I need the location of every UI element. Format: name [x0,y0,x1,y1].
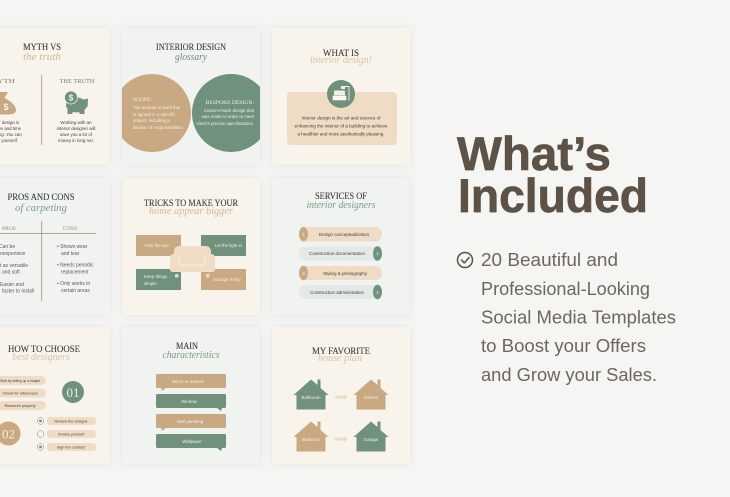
circle: bespoke design: Custom-made design that [204,108,255,113]
house: kitchen: Kitchen [364,395,379,400]
list: pros: Easier and [0,282,24,288]
heading: how to choose: HOW TO CHOOSE [8,344,80,354]
circle: scope [122,74,191,152]
script heading: interior designers: interior designers [306,200,376,211]
list: cons: replacement [61,270,89,276]
checklist: first group: Research properly [4,404,36,408]
text: definition: enhancing the interior of a building to achieve [294,124,388,128]
text: truth description: save you a lot of [60,132,93,137]
script heading: of carpeting: of carpeting [15,202,67,214]
arrow [335,394,348,400]
text: description [481,250,676,385]
definition box [287,92,397,145]
step 4 [299,285,382,299]
heading: what is: WHAT IS [323,48,359,58]
script heading: interior design: interior design! [310,55,372,66]
circle: bespoke design: client's precise specifications. [197,121,254,126]
panel: what is interior design [272,28,410,165]
house: garage: Garage [364,437,379,442]
house: bedroom: Bedroom [302,437,320,442]
list: pros: t as versatile [0,263,28,269]
divider [40,75,43,145]
circle: bespoke design: was made to order to meet [202,114,255,119]
checklist: second group: Involve yourself [58,432,85,436]
step 3: Styling & photography [323,271,368,276]
title: what's included: Included [458,169,648,222]
heading: myth vs: MYTH VS [23,42,61,52]
checklist: second group [37,417,96,451]
step 3: 3 [302,271,305,276]
panel: how to choose best designers [0,327,110,464]
script heading: home appear bigger: home appear bigger [149,206,233,217]
text: definition [294,116,388,136]
list: pros [0,244,34,294]
tip: storage is key: Storage is key [213,277,242,282]
tip: let the light in: Let the light in [215,243,243,248]
panel: tricks to make your home appear bigger [122,178,260,315]
heading: interior design: INTERIOR DESIGN [156,42,226,52]
text: truth description [57,120,95,143]
text: description: to Boost your Offers [481,336,646,356]
title: what's included: What’s [457,127,611,180]
step 1 [299,227,382,242]
script heading: house plan: house plan [318,353,362,364]
title: what's included [457,127,648,222]
table rules [0,221,96,301]
heading: main: MAIN [176,341,198,351]
tip: trick the eye: Trick the eye [144,243,170,248]
text: truth description: Working with an [60,120,92,125]
script heading: characteristics: characteristics [162,350,220,361]
checklist: second group: Sign the contract [57,446,86,450]
step 3 [299,266,382,280]
callout: wallpaper: Wallpaper [182,439,202,444]
heading: my favorite: MY FAVORITE [312,346,370,356]
heading: tricks: TRICKS TO MAKE YOUR [144,198,238,208]
list: cons [57,244,94,294]
tip: keep things simple: simple [144,281,157,286]
panel: myth vs the truth [0,28,110,165]
script heading: the truth: the truth [23,52,61,63]
badge: 01: 01 [66,385,80,400]
list: cons: • Only works in [57,281,90,287]
circle: scope: division of responsibilities. [133,125,184,130]
circle: bespoke design: BESPOKE DESIGN: [206,100,254,106]
script heading: glossary: glossary [175,52,208,63]
callout: mirror or artwork: Mirror or artwork [172,379,205,384]
checklist: second group: Review the designs [55,420,88,424]
column heading: pros: PROS [2,226,16,232]
tip: keep things simple: Keep things [144,274,168,279]
icon: piggy bank: $ [69,94,74,102]
list: cons: • Needs periodic [57,262,94,268]
text: description: 20 Beautiful and [481,250,618,270]
text: myth description [0,120,22,143]
panel: services of interior designers [272,178,410,315]
panel: pros and cons of carpeting [0,178,110,315]
circle: bespoke design [192,74,260,152]
circle: scope: project, including a [133,118,170,123]
panel: interior design glossary [122,28,260,166]
heading: pros and cons: PROS AND CONS [8,192,74,202]
text: definition: a healthier and more aesthetically pleasing. [298,132,384,136]
circle: scope: is agreed in a specific [133,112,176,117]
icon: armchair and lamp badge [327,80,355,108]
column heading: cons: CONS [63,226,77,232]
arrow [335,436,348,442]
heading: services of: SERVICES OF [315,191,367,201]
script heading: best designers: best designers [12,352,70,363]
list: cons: certain areas [61,288,90,294]
icon: money bag: $ [3,102,9,112]
checklist: first group: Start by setting up a budget [0,379,41,383]
tip: keep things simple [136,269,181,290]
list: pros: and soft [2,270,20,276]
badge: 02: 02 [2,426,15,442]
list: cons: • Shows wear [57,244,88,250]
column heading: the truth: THE TRUTH [60,79,95,85]
template card grid [0,28,410,464]
step 4: 4 [376,290,379,295]
icon: sofa [170,246,215,278]
checklist: first group [0,376,46,410]
step 1: Design conceptualization [319,232,370,237]
house: bathroom: Bathroom [301,395,321,400]
step 2 [299,246,382,261]
step 4: Construction administration [310,290,365,295]
text: truth description: money in long run. [58,138,94,143]
text: definition: Interior design is the art and science of [302,116,381,120]
step 2: Construction documentation [309,251,366,256]
step 1: 1 [302,232,305,237]
callout: window: Window [181,399,198,404]
panel: main characteristics [122,327,260,464]
text: description: Social Media Templates [481,308,676,328]
circle: scope: The amount of work that [133,105,181,110]
text: description: and Grow your Sales. [481,365,657,385]
icon: check circle [458,252,472,268]
checklist: first group: Check for references [2,392,38,396]
step 2: 2 [376,251,379,256]
text: description: Professional-Looking [481,279,650,299]
text: truth description: interior designer will [57,126,95,131]
callout: wall paneling: Wall paneling [177,419,204,424]
list: cons: and tear [61,251,80,257]
circle: scope: SCOPE: [133,97,152,103]
panel: my favorite house plan [272,327,410,464]
list: pros: faster to install [2,288,34,294]
